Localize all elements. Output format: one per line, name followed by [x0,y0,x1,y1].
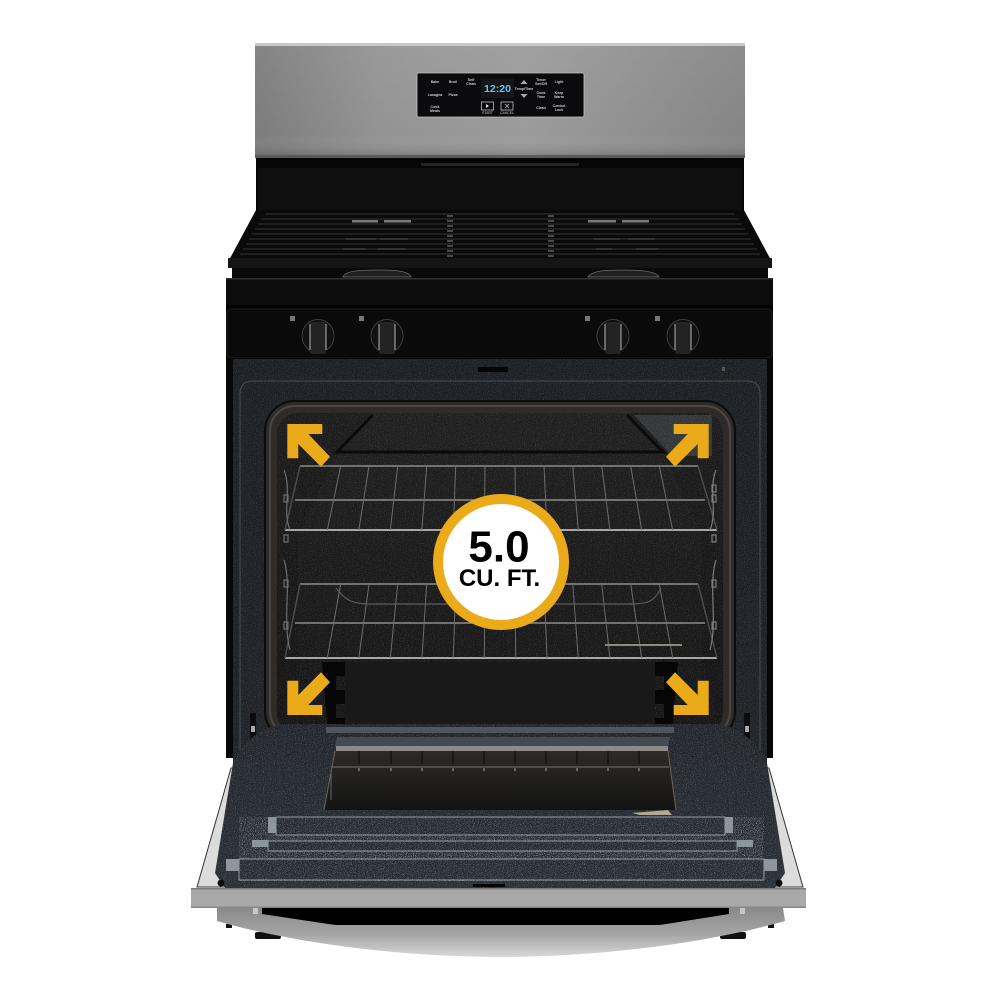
panel button labels: Clean [536,106,546,110]
door handle [217,908,785,957]
start and cancel buttons [482,102,514,115]
manifold band [226,278,773,305]
door step corner highlights [226,817,777,871]
knob 3 [585,316,629,354]
capacity badge [438,499,564,625]
rack supports right [710,470,716,650]
panel button labels: Control [553,104,565,108]
oven feet [226,924,774,939]
rear vent and black backsplash [256,158,744,218]
panel button labels: Self [468,78,475,82]
cavity speckle [277,413,723,733]
open oven door [197,720,803,890]
side walls [277,413,373,733]
knob 2 [359,316,403,354]
panel button labels: Temp/Time [515,87,533,91]
start and cancel buttons: CANCEL [500,111,514,115]
arrow: bottom right [666,672,709,715]
panel button labels: Lock [555,108,563,112]
arrow: bottom left [287,672,330,715]
door latch slot [473,884,505,887]
arrow: top right [666,424,709,467]
backguard: stainless panel [255,43,745,158]
panel button labels: Pizza [448,93,458,97]
panel button labels: Broil [449,80,457,84]
panel button labels: Bake [431,80,439,84]
rack supports left [284,470,290,650]
panel button labels: Time [537,95,545,99]
door top ledges [326,727,674,751]
door screws [218,880,782,886]
digital clock display [481,79,514,98]
grate bars [240,214,760,254]
door liner [215,724,785,888]
start and cancel buttons: START [482,111,493,115]
panel button labels: Keep [555,91,564,95]
capacity unit: CU. FT. [459,565,540,592]
knob 1 [290,316,334,354]
cooktop with grates [228,210,772,268]
oven front frame: enamel [226,358,773,779]
door embossed steps [239,817,764,880]
oven floor [345,662,655,724]
panel button labels: Cook [537,91,545,95]
door front edge [191,888,806,908]
hinges [250,713,750,748]
panel button labels: Clean [466,82,476,86]
arrow: top left [287,424,330,467]
knob panel [226,305,773,360]
panel button labels: Cook [431,105,439,109]
upper oven rack [285,466,717,530]
burners and cooktop gap [232,268,768,279]
infographic: gas range with oven capacity callout [191,43,806,957]
grate highlights [352,220,649,222]
panel button labels: Lasagna [428,93,443,97]
panel button labels [428,78,565,113]
door window [324,751,676,815]
digital clock display: 12:20 [484,83,511,95]
door outer trim [197,768,236,887]
panel button labels: Set/Off [535,82,548,86]
lower oven rack [285,584,717,658]
oven cavity interior [265,401,735,741]
knob 4 [655,316,699,354]
panel button labels: Warm [554,95,564,99]
top right lit corner [634,415,712,456]
arrow buttons [520,80,528,98]
control panel with display [417,73,584,117]
panel button labels: Meals [430,109,440,113]
capacity number: 5.0 [468,522,530,572]
panel button labels: Light [555,80,564,84]
panel button labels: Timer [536,78,546,82]
